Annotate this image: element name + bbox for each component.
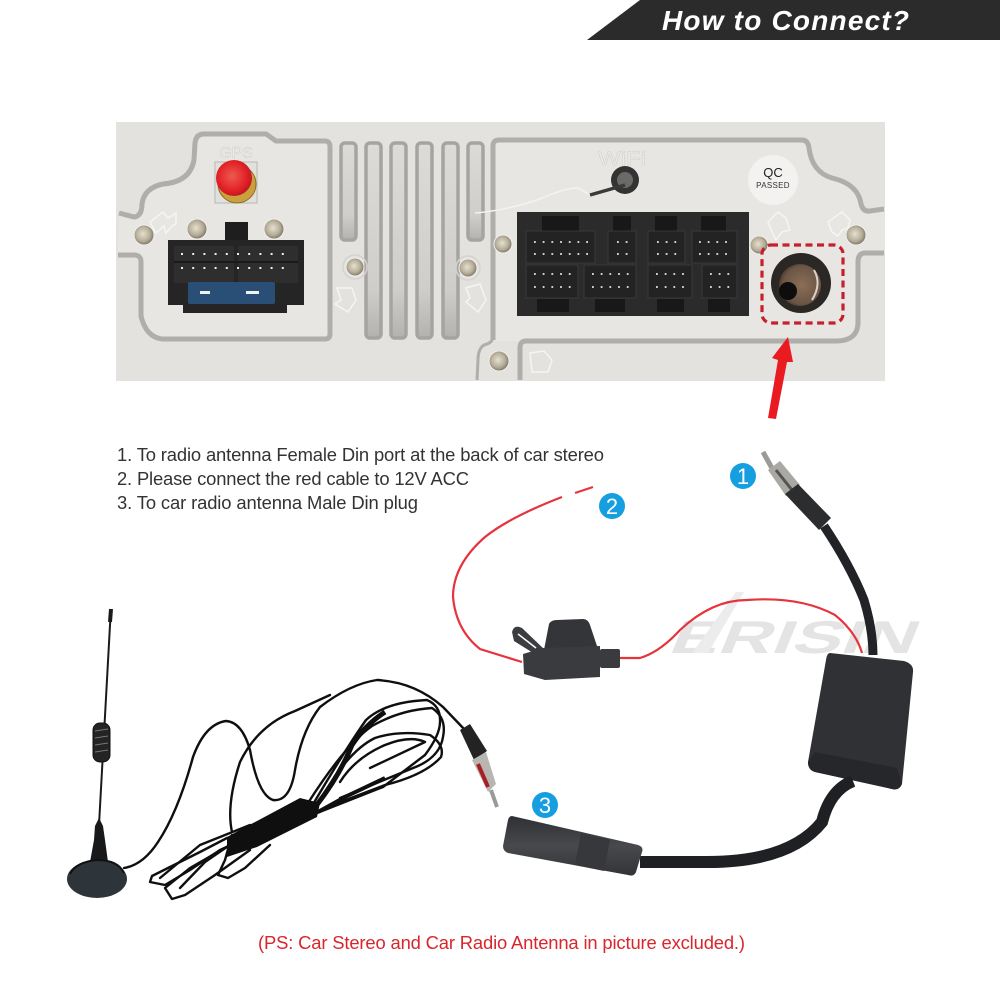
coiled antenna cable: [124, 680, 465, 899]
badge 3: 3: [539, 793, 551, 818]
male din plug on antenna cable: [460, 724, 497, 807]
blue fuse: [188, 282, 275, 304]
cable: [824, 526, 873, 655]
QC passed sticker: [748, 155, 798, 205]
inline fuse holder: [512, 619, 620, 680]
multi-pin connector block: [517, 212, 749, 316]
adapter: black antenna cable and male plug: [763, 452, 873, 655]
panel: car stereo back plate: [116, 122, 885, 381]
red power wire: [453, 487, 862, 662]
right recess groove: [477, 140, 885, 380]
screws: [134, 219, 866, 371]
adapter output cable: [640, 781, 853, 862]
WiFi port and thin wire: WiFi: [598, 149, 646, 170]
header banner: How to Connect?: [587, 0, 1000, 40]
badge 2: [599, 493, 625, 519]
QC passed sticker: PASSED: [756, 181, 790, 190]
badge 1: [730, 463, 756, 489]
instruction text: [117, 444, 604, 513]
watermark: Erisin: ERISIN: [663, 613, 928, 664]
QC passed sticker: QC: [763, 165, 783, 180]
magnetic car radio antenna: [67, 609, 127, 898]
GPS port: GPS: [219, 145, 253, 162]
instruction text: 3. To car radio antenna Male Din plug: [117, 492, 418, 513]
header banner: How to Connect?: How to Connect?: [662, 5, 909, 36]
number badges: [532, 463, 756, 818]
instruction text: 1. To radio antenna Female Din port at the back of car stereo: [117, 444, 604, 465]
red dashed highlight box: [762, 245, 843, 323]
adapter module box: [808, 653, 913, 789]
badge 3: [532, 792, 558, 818]
metal sleeve: [768, 461, 800, 496]
red arrow pointing to port: [768, 337, 793, 419]
cable bundle: [227, 712, 385, 857]
left power connector: [168, 222, 304, 313]
engraved arrow marks: [150, 212, 850, 372]
coil: [93, 723, 110, 762]
black plug body: [785, 484, 831, 530]
badge 2: 2: [606, 494, 618, 519]
plug pin: [763, 452, 773, 470]
GPS port: [215, 145, 257, 203]
female din port: [771, 253, 831, 313]
magnetic disc: [67, 860, 127, 898]
badge 1: 1: [737, 464, 749, 489]
whip: [99, 609, 111, 825]
female din connector: [503, 816, 642, 876]
instruction text: 2. Please connect the red cable to 12V ACC: [117, 468, 469, 489]
cone base: [90, 818, 108, 862]
footnote: (PS: Car Stereo and Car Radio Antenna in picture excluded.): [258, 932, 745, 953]
WiFi port and thin wire: [475, 149, 646, 213]
ventilation slots: [341, 143, 483, 338]
watermark: Erisin: [663, 592, 928, 664]
left recess groove: [118, 134, 330, 339]
